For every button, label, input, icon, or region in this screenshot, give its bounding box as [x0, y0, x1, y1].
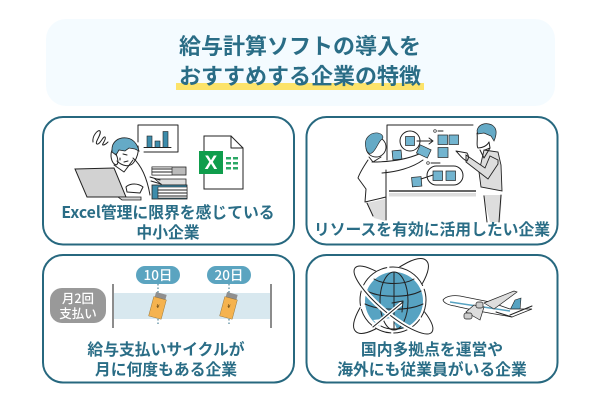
panel 3 caption: 月に何度もある企業 [95, 357, 237, 380]
title panel [46, 19, 555, 106]
icon: laptop [75, 168, 141, 200]
panel: global offices [306, 249, 558, 382]
icon: book stack [150, 167, 187, 199]
panel: Excel management [43, 117, 294, 244]
marker: 20th: 20日 [215, 264, 243, 284]
icon: globe [344, 249, 441, 343]
marker: 20th: ¥ [227, 303, 231, 310]
title highlight [176, 83, 424, 90]
person left [358, 133, 431, 221]
icon: chart frame [138, 125, 178, 152]
icon: worried person [111, 138, 150, 195]
panel 4 caption [337, 337, 527, 380]
panel: pay cycle [43, 255, 294, 382]
panel 3 caption [87, 337, 245, 380]
panel: resources [306, 117, 558, 244]
timeline band [112, 284, 272, 328]
panel 3 caption: 給与支払いサイクルが [87, 337, 245, 360]
panel 4 caption: 海外にも従業員がいる企業 [337, 357, 527, 380]
marker: 10th: ¥ [156, 303, 160, 310]
whiteboard [387, 125, 476, 196]
marker: 10th: 10日 [144, 264, 172, 284]
title: 給与計算ソフトの導入を [179, 29, 421, 61]
icon: Excel file: X [205, 153, 218, 174]
icon: worried squiggle [93, 131, 108, 145]
icon: Excel file [199, 136, 243, 189]
icon: airplane [443, 291, 532, 320]
marker: 20th [207, 264, 251, 326]
label: twice a month: 支払い [59, 303, 97, 322]
label: twice a month [50, 288, 106, 323]
panel 4 caption: 国内多拠点を運営や [361, 337, 503, 360]
panel 2 caption: リソースを有効に活用したい企業 [314, 217, 550, 240]
panel 1 caption: 中小企業 [136, 220, 200, 243]
label: twice a month: 月2回 [62, 288, 94, 307]
panel 1 caption: Excel管理に限界を感じている [61, 200, 275, 223]
title: おすすめする企業の特徴 [179, 59, 421, 91]
panel 1 caption [61, 200, 275, 243]
title [179, 29, 421, 91]
person right [456, 124, 502, 222]
marker: 10th [136, 264, 180, 326]
